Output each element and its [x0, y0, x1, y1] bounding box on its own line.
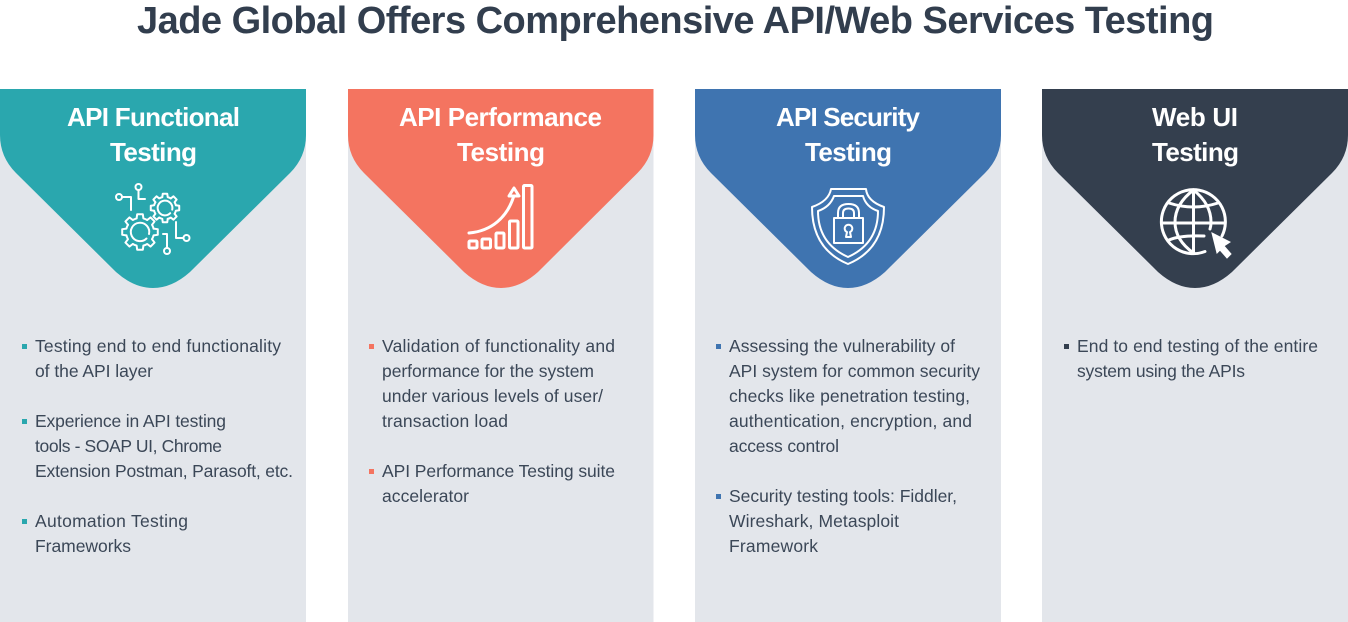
bullet list: Extension Postman, Parasoft, etc.	[35, 461, 293, 481]
bullet list: performance for the system	[382, 361, 594, 381]
bullet list: accelerator	[382, 486, 469, 506]
header shape: coral	[348, 89, 654, 288]
heading: Testing	[1152, 137, 1239, 167]
bullet list	[369, 336, 615, 506]
heading: Testing	[110, 137, 197, 167]
icon: shield with padlock	[812, 189, 884, 264]
header shape: dark	[1042, 89, 1348, 288]
heading	[776, 102, 921, 167]
bullet list	[1064, 336, 1318, 381]
bullet list: API Performance Testing suite	[382, 461, 615, 481]
panel: API Functional Testing	[0, 89, 306, 622]
panel: API Security Testing	[695, 89, 1001, 622]
heading: API Functional	[67, 102, 240, 132]
bullet list: Security testing tools: Fiddler,	[729, 486, 957, 506]
bullet list: Experience in API testing	[35, 411, 226, 431]
bullet list: Automation Testing	[35, 511, 188, 531]
heading: Testing	[805, 137, 892, 167]
bullet list: Validation of functionality and	[382, 336, 615, 356]
bullet list	[716, 336, 980, 556]
bullet list: access control	[729, 436, 839, 456]
bullet list: End to end testing of the entire	[1077, 336, 1318, 356]
bullet list: Framework	[729, 536, 818, 556]
bullet list: authentication, encryption, and	[729, 411, 972, 431]
bullet list	[22, 336, 293, 556]
icon: globe with cursor	[1161, 190, 1231, 258]
heading: API Performance	[399, 102, 602, 132]
heading	[399, 102, 602, 167]
bullet list: Frameworks	[35, 536, 131, 556]
bullet list: tools - SOAP UI, Chrome	[35, 436, 222, 456]
heading: Testing	[457, 137, 545, 167]
title: Jade Global Offers Comprehensive API/Web Services Testing	[137, 0, 1214, 42]
icon: rising bar chart	[469, 186, 532, 248]
bullet list: under various levels of user/	[382, 386, 603, 406]
bullet list: of the API layer	[35, 361, 153, 381]
header shape: teal	[0, 89, 306, 288]
heading: API Security	[776, 102, 921, 132]
bullet list: Testing end to end functionality	[35, 336, 281, 356]
panel: Web UI Testing	[1042, 89, 1348, 622]
heading	[1152, 102, 1239, 167]
bullet list: transaction load	[382, 411, 508, 431]
bullet list: checks like penetration testing,	[729, 386, 970, 406]
bullet list: API system for common security	[729, 361, 980, 381]
bullet list: Assessing the vulnerability of	[729, 336, 955, 356]
header shape: blue	[695, 89, 1001, 288]
bullet list: system using the APIs	[1077, 361, 1245, 381]
icon: gears and circuit	[116, 184, 190, 254]
heading: Web UI	[1152, 102, 1238, 132]
panel: API Performance Testing	[348, 89, 654, 622]
heading	[67, 102, 240, 167]
bullet list: Wireshark, Metasploit	[729, 511, 899, 531]
